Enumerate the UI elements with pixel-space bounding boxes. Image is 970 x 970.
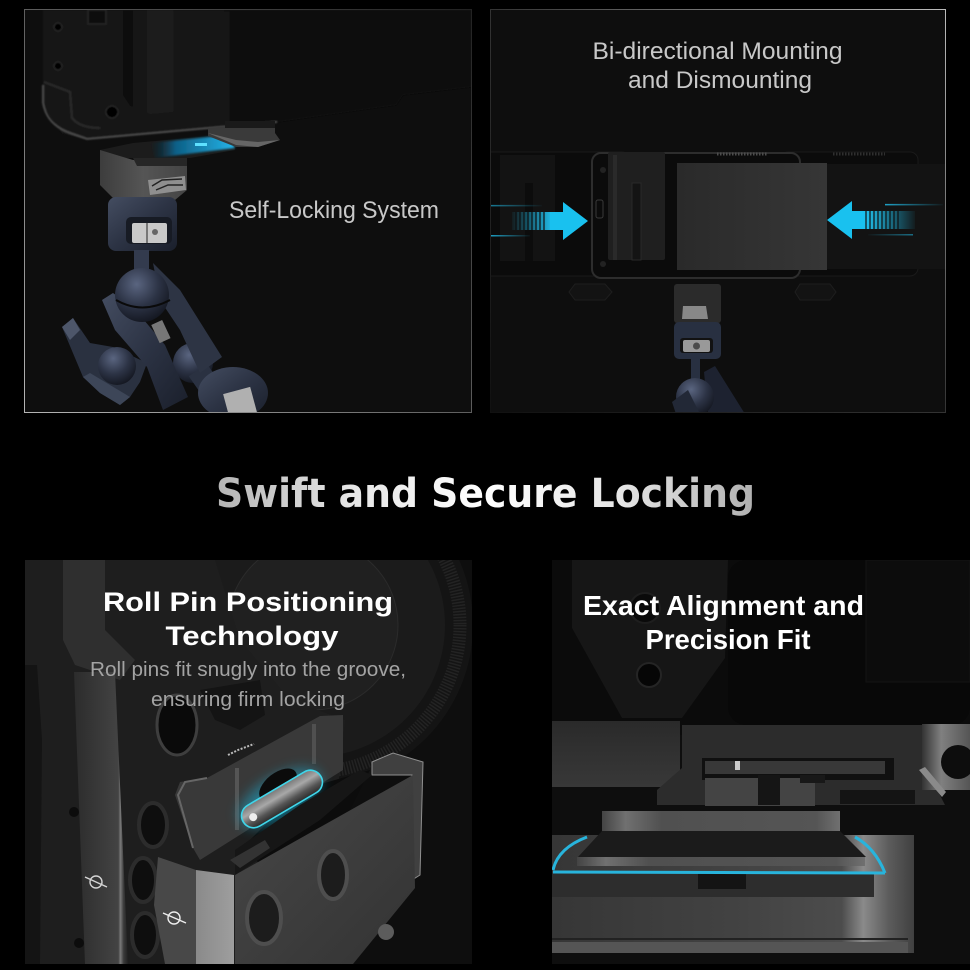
heading: exact alignment: Exact Alignment and — [583, 590, 864, 621]
cyan rail highlight — [100, 134, 235, 158]
index mark front — [163, 912, 186, 924]
description: roll pin: Roll pins fit snugly into the groove, — [90, 659, 406, 681]
camera cage — [25, 560, 345, 964]
central monitor — [592, 152, 827, 278]
quick release shoe — [100, 150, 187, 200]
front block — [154, 770, 415, 964]
heading: roll pin: Roll Pin Positioning — [103, 587, 393, 617]
heading: bi-directional mounting: and Dismounting — [628, 67, 812, 94]
panel: exact alignment — [552, 560, 970, 964]
hole behind pin — [259, 768, 297, 797]
dovetail plate — [577, 811, 866, 866]
mid bracket — [552, 721, 970, 806]
roll pin — [240, 769, 324, 829]
magic arm — [62, 263, 268, 419]
label: self-locking system: Self-Locking System — [229, 197, 439, 224]
back plate — [175, 715, 343, 860]
panel: bi-directional mounting — [480, 10, 945, 416]
description: roll pin — [90, 659, 406, 711]
heading: bi-directional mounting — [592, 38, 842, 94]
ghost monitor right — [786, 152, 918, 276]
description: roll pin: ensuring firm locking — [151, 689, 345, 711]
rail foot — [208, 121, 280, 147]
lens — [215, 560, 466, 776]
panel: self-locking system — [25, 10, 471, 419]
ghost monitor left — [491, 152, 624, 276]
shoe and ball head — [672, 284, 745, 416]
heading: exact alignment — [584, 595, 862, 650]
index mark — [85, 876, 107, 888]
panel: roll pin positioning — [25, 560, 472, 964]
heading: bi-directional mounting: Bi-directional Mounting — [592, 38, 842, 65]
right bracket — [240, 753, 423, 880]
heading: exact alignment: Precision Fit — [646, 624, 810, 655]
ball head — [108, 197, 177, 270]
cyan fit line — [553, 837, 885, 873]
upper camera — [630, 592, 662, 688]
monitor body — [41, 10, 278, 140]
title: Swift and Secure Locking — [216, 471, 755, 517]
heading: roll pin — [103, 587, 393, 651]
ghost feet — [569, 284, 836, 300]
cyan glow — [232, 762, 328, 836]
arrow: left — [827, 201, 943, 239]
lower mount base — [552, 835, 914, 953]
arrow: right — [490, 202, 588, 240]
heading: roll pin: Technology — [166, 621, 338, 651]
